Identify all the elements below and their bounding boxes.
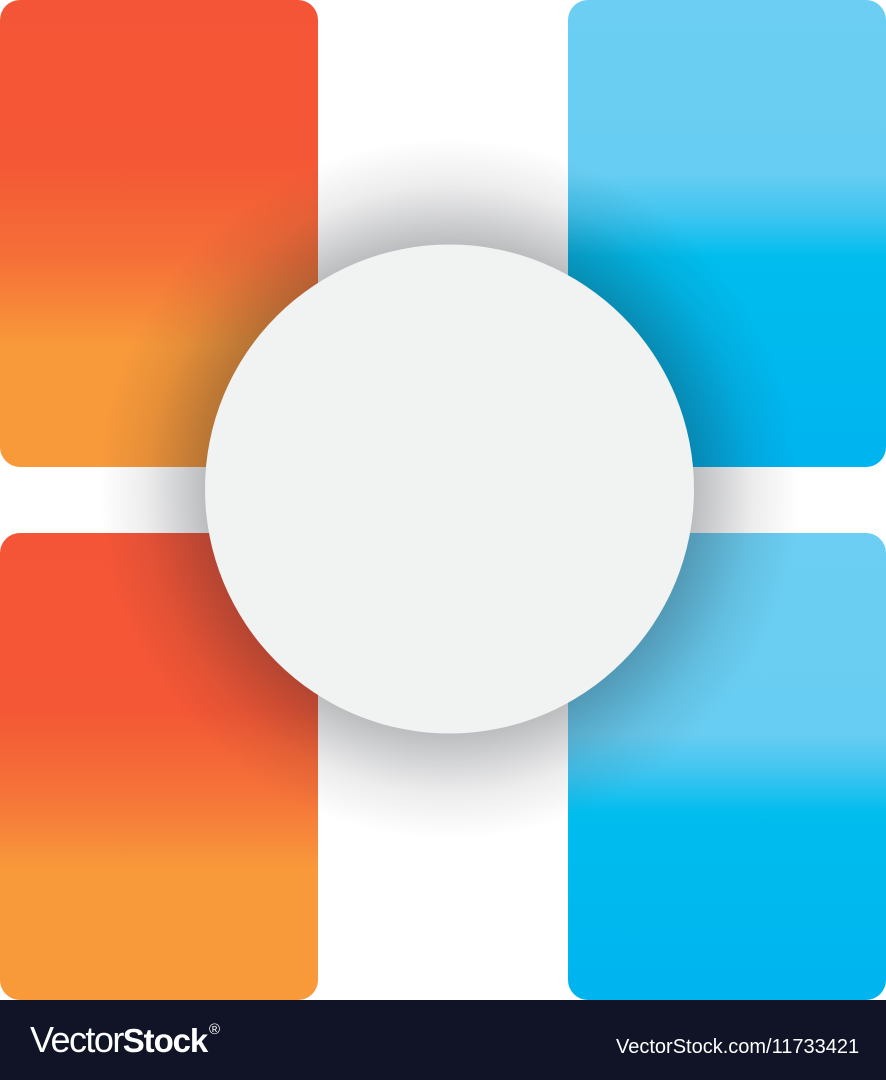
image credit: VectorStock.com/11733421	[616, 1036, 859, 1058]
central circle	[205, 244, 694, 734]
panel: bottom left orange card	[0, 533, 318, 1000]
logo: VectorStock: VectorStock	[30, 1019, 207, 1060]
panel: top right blue card	[568, 0, 886, 467]
logo: VectorStock: ®	[209, 1021, 220, 1038]
footer bar	[0, 1000, 886, 1080]
circle drop shadow	[100, 139, 800, 839]
panel: top left orange card	[0, 0, 318, 467]
panel: bottom right blue card	[568, 533, 886, 1000]
